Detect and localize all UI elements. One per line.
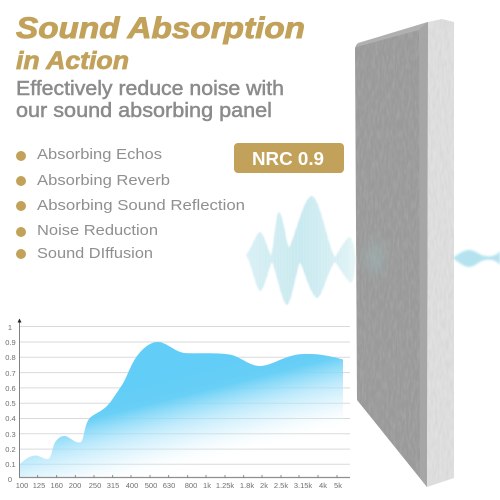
area chart (5, 318, 350, 490)
NRC badge: NRC 0.9 (252, 149, 324, 169)
x axis labels: 5k (334, 481, 342, 490)
y axis labels: 0.4 (5, 414, 16, 423)
x axis labels: 1k (203, 481, 211, 490)
title: Sound Absorption (16, 12, 305, 45)
x axis labels: 2.5k (274, 481, 288, 490)
x axis labels: 125 (33, 481, 45, 490)
sound wave incoming (246, 196, 356, 305)
bullet: Noise Reduction: Noise Reduction (37, 222, 158, 239)
bullet: Absorbing Echos: Absorbing Echos (37, 146, 162, 163)
x axis labels: 160 (50, 481, 63, 490)
y axis labels: 1 (8, 323, 12, 332)
y axis labels: 0 (8, 475, 12, 484)
y axis labels: 0.8 (5, 353, 16, 362)
x axis labels: 250 (89, 481, 101, 490)
x axis labels: 800 (185, 481, 197, 490)
y axis labels: 0.3 (5, 430, 16, 439)
panel front face (355, 22, 428, 487)
sound glow through panel (359, 234, 391, 282)
bullet: Absorbing Reverb: Absorbing Reverb (37, 172, 170, 189)
subtitle: our sound absorbing panel (16, 100, 272, 122)
acoustic panel (350, 15, 457, 490)
NRC badge (234, 143, 344, 173)
x axis labels: 100 (16, 481, 28, 490)
x axis labels: 1.8k (240, 481, 254, 490)
bullet: Sound Diffusion: Sound DIffusion (37, 245, 153, 262)
y axis labels: 0.9 (5, 338, 16, 347)
x axis labels: 400 (126, 481, 138, 490)
x axis labels: 200 (69, 481, 81, 490)
y axis labels: 0.5 (5, 399, 16, 408)
x axis ticks (38, 475, 337, 478)
y axis labels: 0.2 (5, 445, 16, 454)
feature list (16, 146, 245, 262)
absorption curve area (19, 342, 343, 478)
bullet: Absorbing Sound Reflection: Absorbing Sound Reflection (37, 197, 245, 214)
y axis labels (5, 323, 16, 484)
subtitle: Effectively reduce noise with (16, 78, 284, 100)
x axis labels: 630 (163, 481, 175, 490)
y axis labels: 0.1 (5, 460, 16, 469)
panel edge face (427, 19, 454, 487)
x axis labels: 3.15k (294, 481, 312, 490)
x axis labels: 4k (319, 481, 327, 490)
title (16, 12, 305, 75)
x axis labels (16, 481, 342, 490)
title: in Action (16, 47, 129, 75)
x axis labels: 1.25k (216, 481, 234, 490)
y axis labels: 0.6 (5, 384, 16, 393)
y axis labels: 0.7 (5, 369, 16, 378)
x axis labels: 315 (107, 481, 119, 490)
panel top bevel (356, 22, 428, 47)
y axis (18, 321, 20, 478)
sound wave outgoing (453, 250, 500, 267)
subtitle (16, 78, 284, 122)
panel side bevel (419, 22, 428, 487)
x axis labels: 2k (260, 481, 268, 490)
grid lines (19, 326, 350, 464)
x axis (19, 476, 350, 478)
x axis labels: 500 (145, 481, 157, 490)
